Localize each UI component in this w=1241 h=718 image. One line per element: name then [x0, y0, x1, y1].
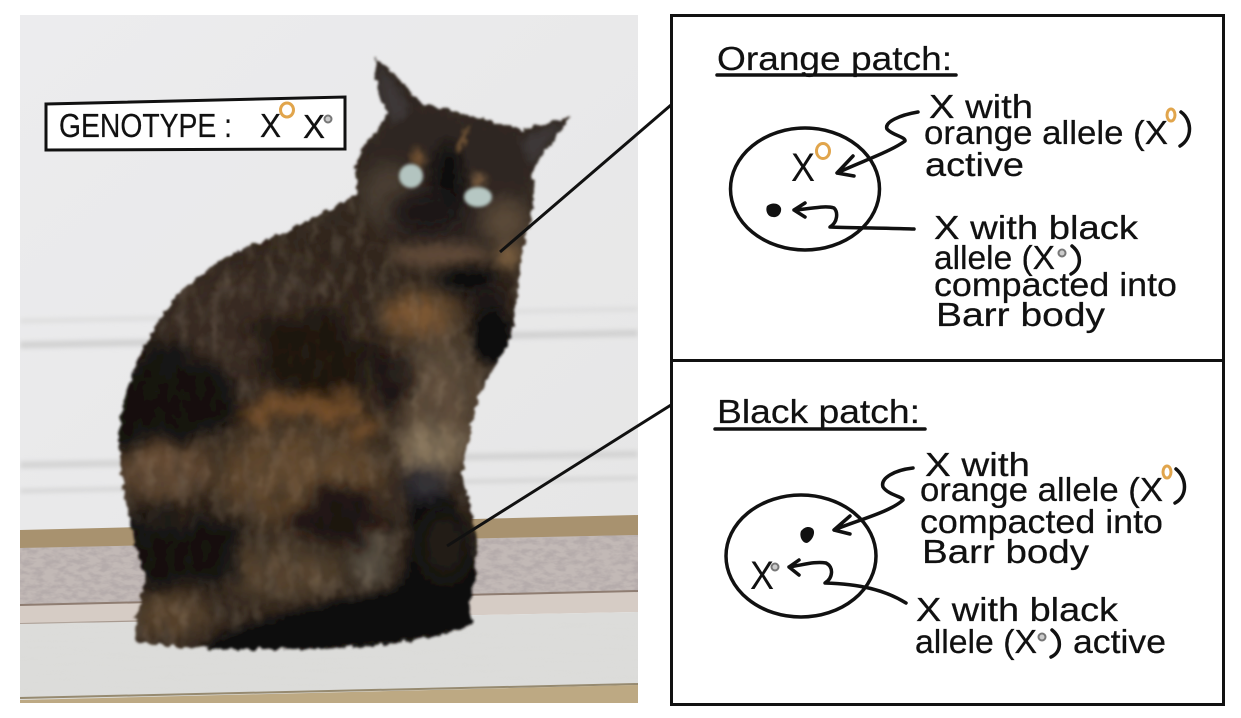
wall	[20, 15, 638, 545]
leader line: orange patch	[500, 105, 671, 252]
striped rug	[20, 533, 638, 624]
wall moulding	[20, 309, 638, 491]
label: compacted orange allele	[920, 446, 1184, 570]
cat eyes	[399, 164, 492, 207]
active X with orange allele	[791, 144, 830, 190]
Barr body dot	[800, 527, 814, 543]
heading: black patch: Black patch:	[717, 393, 920, 430]
arrow to active X	[789, 560, 906, 603]
panel: black patch	[672, 360, 1224, 704]
Barr body dot	[766, 204, 781, 217]
label: active orange allele	[924, 88, 1190, 183]
pale mat	[20, 612, 638, 700]
label: compacted black allele: X with black	[934, 209, 1139, 246]
label: compacted black allele: allele (X	[934, 239, 1055, 276]
label: active orange allele: orange allele (X	[924, 114, 1168, 151]
wooden floor	[20, 685, 638, 703]
label: active orange allele: X with	[929, 88, 1033, 125]
heading: orange patch: Orange patch:	[717, 40, 952, 77]
label: active black allele: active	[1073, 623, 1166, 660]
black fur patches and orange haunch	[100, 310, 405, 590]
fur texture	[118, 110, 534, 652]
label: compacted black allele: compacted into	[934, 266, 1177, 303]
cell circle	[730, 128, 880, 250]
label: compacted orange allele: X with	[925, 446, 1030, 483]
label box	[46, 97, 345, 150]
fur base	[116, 56, 572, 652]
photo: tortoiseshell cat	[20, 15, 638, 703]
active X with black allele: X	[750, 554, 774, 598]
panel: orange patch	[672, 16, 1224, 360]
label: compacted black allele	[934, 209, 1177, 333]
label: compacted orange allele: compacted into	[920, 503, 1163, 540]
fur colour patches	[119, 265, 484, 639]
arrow to Barr body	[794, 203, 914, 229]
genotype label	[46, 97, 345, 150]
cell circle	[726, 495, 876, 617]
leader line: black patch	[447, 405, 671, 546]
arrow to active X	[837, 112, 918, 176]
black tail	[195, 469, 479, 655]
head	[360, 58, 571, 268]
arrow to Barr body	[834, 468, 913, 534]
label text: GENOTYPE :	[59, 107, 232, 144]
label: compacted orange allele: Barr body	[922, 533, 1090, 570]
panel frame	[672, 360, 1224, 704]
label: active black allele: X with black	[916, 591, 1119, 628]
label: compacted orange allele: orange allele (X	[920, 471, 1163, 508]
label: active black allele	[915, 591, 1166, 660]
label: active black allele: allele (X	[915, 623, 1037, 660]
panel frame	[672, 16, 1224, 360]
active X with orange allele: X	[791, 146, 815, 190]
wooden baseboard	[20, 515, 638, 549]
X orange symbol: X	[260, 107, 281, 144]
cat	[116, 56, 572, 654]
X orange symbol	[260, 103, 294, 144]
X black symbol: X	[303, 108, 325, 145]
label: active orange allele: active	[925, 146, 1024, 183]
black chest patches	[438, 267, 512, 364]
label: compacted black allele: Barr body	[936, 296, 1106, 333]
